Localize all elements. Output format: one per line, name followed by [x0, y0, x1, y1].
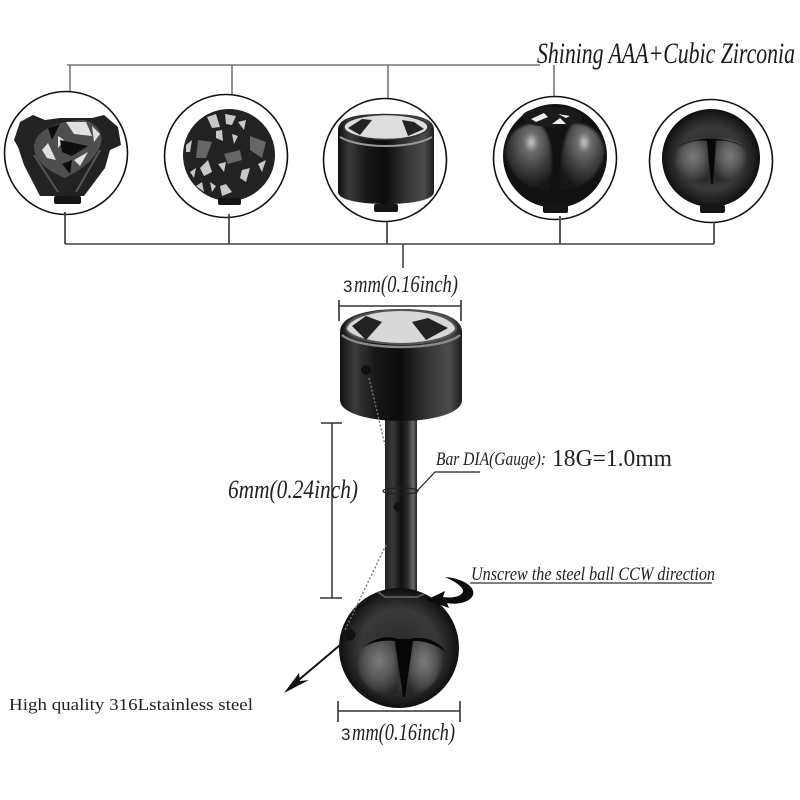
label: bar length 6mm: 6mm(0.24inch): [228, 475, 358, 504]
barbell: steel ball end: [339, 588, 459, 708]
dimension line: ball width: [338, 701, 460, 722]
connector stub under option 5: [713, 222, 715, 244]
icon: counter-clockwise rotate arrow: [426, 577, 473, 608]
bar gauge ring and leader: [383, 472, 480, 494]
label: top diameter 3mm: mm(0.16inch): [354, 272, 458, 298]
option 5: plain steel ball: [650, 100, 772, 222]
label: stainless steel: High quality 316Lstainless steel: [9, 695, 253, 714]
steel marker dots and dotted leader: [344, 365, 402, 640]
bottom connector bracket: [65, 244, 714, 268]
label: ball diameter 3mm: 3: [341, 725, 350, 744]
label: top diameter 3mm: 3: [343, 277, 352, 296]
label: bar gauge: [436, 446, 672, 472]
top connector bracket: [67, 65, 554, 100]
option 1: prong-set heart stone: [4, 92, 128, 214]
connector stub under option 3: [386, 222, 388, 244]
barbell: connecting rod: [385, 415, 417, 595]
option 2: pave crystal ball: [164, 94, 288, 218]
dimension line: top width: [339, 300, 461, 321]
option 3: bezel-set flat cylinder: [324, 98, 446, 222]
label: bar gauge: Bar DIA(Gauge):: [436, 449, 546, 470]
connector stub under option 2: [228, 214, 230, 244]
dimension line: bar length: [320, 423, 342, 598]
label: unscrew direction: Unscrew the steel ball CCW direction: [471, 564, 715, 585]
arrow: steel callout pointer: [284, 640, 346, 693]
label: ball diameter 3mm: mm(0.16inch): [352, 720, 455, 746]
connector stub under option 1: [64, 212, 66, 244]
barbell: bezel-set top: [340, 309, 462, 421]
label: bar gauge: 18G=1.0mm: [552, 446, 672, 472]
option 4: ball with crystal top: [494, 96, 616, 220]
connector stub under option 4: [559, 216, 561, 244]
